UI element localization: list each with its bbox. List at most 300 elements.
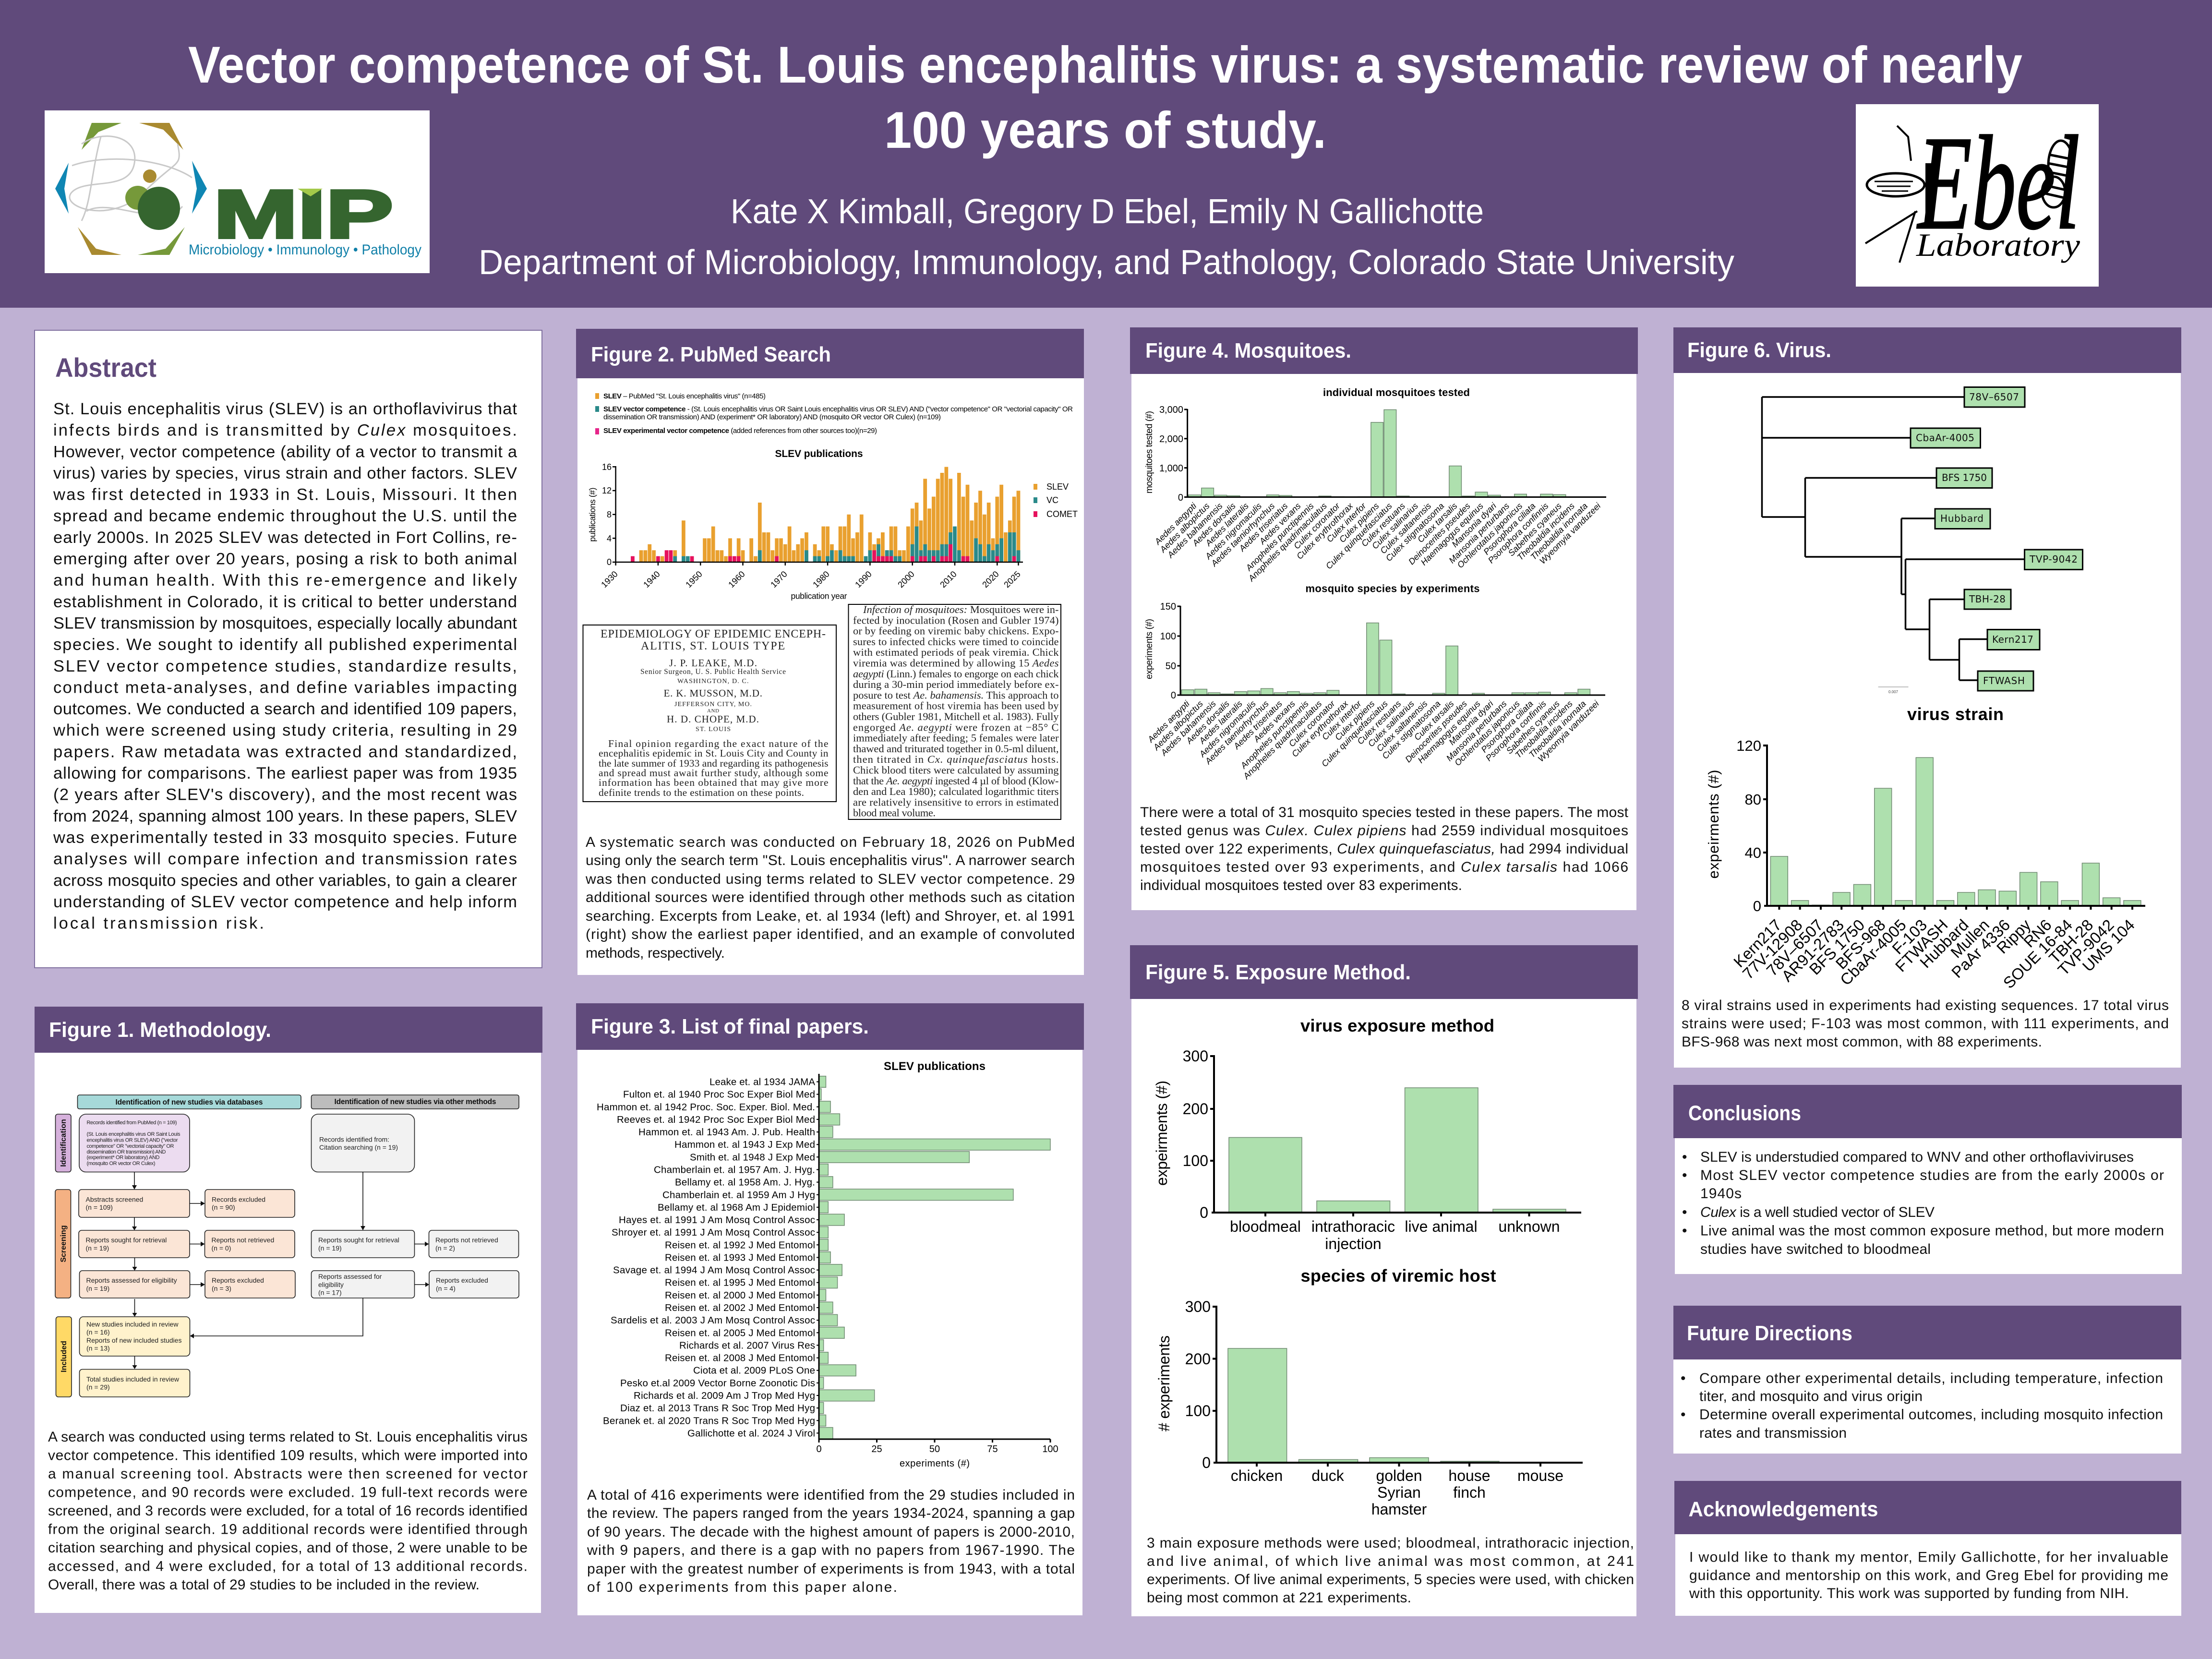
axes: chicken [1231,1467,1283,1484]
bar chart: species of viremic host: species of viremic host [1301,1266,1496,1286]
caption: figure 1: Overall, there was a total of 29 studies to be included in the review. [48,1577,480,1593]
axes: finch [1453,1484,1486,1501]
strain labels [1911,387,2082,691]
excerpt: Shroyer 1991: engorged Ae. aegypti were frozen at −85° C [853,721,1059,733]
strain axis labels: PaAr 4336 [1948,916,2013,981]
bar chart: SLEV publications per year [588,448,1078,601]
axes: 2000 [896,569,916,589]
species labels: Anopheles punctipennis [1238,699,1310,771]
abstract text: and human health. With this re-emergence and likely [53,571,517,589]
strain axis labels: 77V-12908 [1739,916,1806,983]
abstract text: was first detected in 1933 in St. Louis, Missouri. It then [53,486,517,504]
species labels: Culex stigmatosoma [1384,501,1446,563]
caption: figure 2: methods, respectively. [586,945,725,961]
paper labels: Reeves et. al 1942 Proc Soc Exper Biol Med [617,1114,815,1125]
axes: 50 [1166,661,1176,672]
caption: figure 1: competence, and 90 records were excluded. 19 full-text records were [48,1484,528,1501]
axes: experiments (#) [900,1458,970,1469]
species labels: Culex tarsalis [1416,501,1459,544]
box: records identified pubmed [79,1114,190,1172]
legend: search terms: SLEV – PubMed "St. Louis encephalitis virus" (n=485) [603,392,766,400]
box: total studies [80,1369,190,1397]
excerpt: Leake 1934: ALITIS, ST. LOUIS TYPE [641,640,785,652]
abstract text: allowing for comparisons. The earliest paper was from 1935 [53,764,517,782]
species labels: Aedes bahamensis [1159,699,1218,758]
strain axis labels: SOUE 16-84 [2000,916,2076,992]
logo: Ebel Laboratory [1856,104,2099,287]
box: reports assessed: (n = 19) [86,1285,109,1292]
paper labels: Reisen et. al 1993 J Med Entomol [665,1252,815,1263]
paper labels: Richards et al. 2009 Am J Trop Med Hyg [634,1390,815,1401]
abstract text: understanding of SLEV vector competence and help inform [53,893,517,911]
conclusions list: • [1682,1204,1687,1220]
bars [1770,757,2141,906]
heading: abstract: Abstract [55,352,156,383]
species labels: Wyeomyia vanduzeei [1538,501,1603,566]
strain axis labels: Hubbard [1916,916,1972,971]
stage: identification: Identification [60,1119,68,1167]
strain axis labels: 78V–6507 [1763,916,1827,979]
abstract text: establishment in Colorado, it is critical to better understand [53,593,517,611]
strain axis labels: BFS-968 [1832,916,1889,973]
axes: # experiments [1155,1335,1173,1431]
paper labels: Reisen et. al 2005 J Med Entomol [665,1327,815,1338]
panel: figure 2 pubmed search [576,329,1084,975]
species labels: Culex interfor [1325,501,1368,544]
axes: 0 [1200,1204,1208,1221]
legend: search terms: SLEV experimental vector competence (added references from other sources too)(n=29) [603,427,877,435]
species labels: Ochlerotatus japonicus [1453,699,1522,768]
axes: Syrian [1377,1484,1421,1501]
species labels: Culex erythrothorax [1290,698,1350,759]
heading: figure 2: Figure 2. PubMed Search [591,343,831,366]
bars [1182,623,1590,695]
box: new studies included: (n = 16) [86,1328,110,1336]
panel: conclusions [1673,1085,2182,1274]
species labels: Theobaldia inornata [1528,501,1589,562]
species labels: Ochlerotatus japonicus [1455,501,1524,570]
legend: search terms [595,392,1073,435]
excerpt: Leake 1934: Senior Surgeon, U. S. Public Health Service [640,668,786,676]
excerpt: Leake 1934: E. K. MUSSON, M.D. [663,687,762,699]
box: new studies included: Reports of new included studies [86,1336,181,1344]
species labels: Mansonia perturbans [1447,501,1511,565]
box: abstracts screened: Abstracts screened [85,1195,143,1203]
paper labels: Savage et. al 1994 J Am Mosq Control Assoc [613,1265,815,1276]
caption: figure 5 [1147,1535,1634,1606]
axes: 200 [1185,1350,1211,1368]
bars [633,467,1018,562]
axes: 100 [1183,1152,1208,1169]
future directions list [1681,1370,2163,1441]
caption: figure 4: individual mosquitoes tested over 83 experiments. [1140,878,1462,893]
species labels: Culex quinquefasciatus [1320,699,1390,769]
excerpt: Shroyer 1991: aegypti (Linn.) females to engorge on each chick [853,668,1059,680]
conclusions list: 1940s [1700,1186,1742,1202]
paper labels: Reisen et. al 1995 J Med Entomol [665,1277,815,1288]
box: other excluded: Reports excluded [436,1276,488,1284]
species labels: Psorophora confinnis [1484,699,1548,763]
species labels: Culex erythrothorax [1295,501,1355,561]
strain axis labels: RN6 [2020,916,2055,951]
strain axis labels: Kern217 [1730,916,1785,971]
abstract text: conduct meta-analyses, and define variables impacting [53,678,517,697]
stage: included [56,1317,72,1397]
strain labels: CbaAr-4005 [1916,432,1974,444]
axes: duck [1311,1467,1345,1484]
bar chart: experiments per paper [597,1060,1058,1469]
excerpt: Shroyer 1991: measurement of host viremia has been used by [853,700,1059,712]
bar chart: species of viremic host [1155,1266,1583,1518]
conclusions list: studies have switched to bloodmeal [1700,1241,1931,1257]
axes: 1990 [853,569,874,589]
abstract text [53,400,517,933]
title: Vector competence of St. Louis encephalitis virus: a systematic review of nearly [188,36,2022,94]
abstract text: across mosquito species and other variables, to gain a clearer [53,871,517,890]
box: reports sought: (n = 19) [85,1244,109,1252]
species labels: Aedes dorsalis [1184,699,1231,746]
bar chart: virus strain: virus strain [1907,704,2004,724]
axes: 2,000 [1159,434,1183,445]
strain axis labels: CbaAr-4005 [1837,916,1910,989]
paper labels: Bellamy et. al 1958 Am. J. Hyg. [675,1177,815,1188]
axes: 0 [816,1444,822,1455]
box: records excluded: (n = 90) [212,1203,235,1211]
paper labels: Hammon et. al 1942 Proc. Soc. Exper. Biol. Med. [597,1102,815,1113]
species labels: Culex interfor [1320,698,1364,742]
caption: figure 3: paper with the greatest number of experiments is from 1943, with a total [587,1561,1075,1577]
axes: bloodmeal [1230,1218,1301,1235]
abstract text: virus) varies by species, virus strain and other factors. SLEV [53,464,517,482]
authors: Kate X Kimball, Gregory D Ebel, Emily N Gallichotte [731,192,1484,231]
paper labels: Reisen et. al 2000 J Med Entomol [665,1290,815,1301]
excerpt: Shroyer 1991: with estimated periods of peak viremia. Chick [853,646,1059,658]
paper labels: Hammon et. al 1943 J Exp Med [674,1139,815,1150]
paper labels: Bellamy et. al 1968 Am J Epidemiol [658,1202,815,1213]
axes [1144,405,1606,503]
excerpt: Shroyer 1991: Chick blood titers were calculated by assuming [853,764,1059,776]
excerpt: Shroyer 1991: blood meal volume. [853,807,936,819]
panel: acknowledgements [1674,1481,2181,1616]
box: records identified citation: Records identified from: [319,1136,389,1143]
bar chart: mosquito species by experiments: mosquito species by experiments [1306,583,1479,594]
box: other not retrieved [429,1230,518,1258]
strain axis labels: Mullen [1947,916,1993,962]
logo: Ebel Laboratory: Ebel [1916,108,2080,257]
arrows [132,1172,429,1369]
species labels: Haemagogus equinus [1419,501,1485,567]
box: other reports sought [311,1230,415,1258]
excerpt: Leake 1934: ST. LOUIS [696,726,731,733]
axes: 1940 [641,569,662,589]
box: records identified pubmed: encephalitis virus OR SLEV) AND ("vector [86,1138,178,1143]
conclusions list: • [1682,1223,1687,1238]
box: records identified citation: Citation searching (n = 19) [319,1143,398,1151]
box: other assessed: (n = 17) [318,1288,342,1296]
panel: figure 6 virus [1673,327,2181,1068]
species labels: Aedes vexans [1251,699,1297,744]
strain labels: TVP-9042 [2029,553,2078,565]
heading: conclusions: Conclusions [1688,1101,1801,1125]
strain axis labels: F-103 [1888,916,1930,958]
strain axis labels: UMS 104 [2079,916,2138,975]
panel: future directions [1673,1306,2181,1454]
excerpt: Shroyer 1991: posure to test Ae. bahamensis. This approach to [853,689,1059,701]
paper labels: Hayes et. al 1991 J Am Mosq Control Assoc [619,1214,815,1226]
species labels: Aedes nigromaculis [1197,699,1258,759]
excerpt: Shroyer 1991: or by feeding on viremic baby chickens. Expo- [853,625,1059,637]
panel: figure 3 list of final papers [576,1003,1084,1615]
species labels: Aedes nigromaculis [1203,501,1263,562]
caption: figure 1: a manual screening tool. Abstracts were then screened for vector [48,1466,528,1482]
species labels: Aedes taeniorhynchus [1203,699,1271,766]
excerpt: Leake 1934: definite trends to the estimation on these points. [599,787,804,798]
chart legend: VC [1046,495,1058,505]
bar chart: virus exposure method [1153,1016,1581,1252]
axes: 75 [987,1444,998,1455]
excerpt: Shroyer 1991: then titrated in Cx. quinquefasciatus hosts. [853,753,1059,765]
caption: figure 5: 3 main exposure methods were used; bloodmeal, intrathoracic injection, [1147,1535,1634,1551]
bar chart: mosquito species by experiments [1144,583,1605,781]
axes: injection [1325,1235,1382,1252]
axes: publication year [791,591,847,601]
abstract text: SLEV transmission by mosquitoes, especially locally abundant [53,614,517,633]
axes: expeirments (#) [1705,770,1722,878]
axes: 8 [607,510,612,519]
axes: 4 [607,534,612,543]
excerpt: Leake 1934: and spread must await further study, although some [599,767,829,779]
axes: 2025 [1002,569,1022,589]
abstract text: outcomes. We conducted a search and identified 109 papers, [53,700,517,718]
future directions list: Determine overall experimental outcomes, including mosquito infection [1699,1407,2163,1423]
excerpt: Leake 1934: information has been obtained that may give more [599,777,829,788]
axes: 300 [1183,1047,1208,1065]
axes: house [1448,1467,1491,1484]
excerpt: Leake 1934: J. P. LEAKE, M.D. [669,657,757,669]
column header: other methods [311,1095,519,1109]
axes: 1930 [599,569,620,589]
title: 100 years of study. [884,101,1326,159]
excerpt: Shroyer 1991: that the Ae. aegypti ingested 4 µl of blood (Klow- [853,775,1059,787]
bar chart: individual mosquitoes tested: individual mosquitoes tested [1323,386,1470,398]
box: records excluded [205,1190,295,1217]
axes: mosquitoes tested (#) [1144,411,1154,493]
caption: figure 3 [587,1487,1075,1595]
caption: figure 6: 8 viral strains used in experiments had existing sequences. 17 total virus [1682,998,2169,1013]
axes: 100 [1185,1402,1211,1419]
abstract text: early 2000s. In 2025 SLEV was detected in Fort Collins, re- [53,529,517,547]
paper labels: Shroyer et. al 1991 J Am Mosq Control Assoc [612,1227,815,1238]
excerpt: Leake 1934: EPIDEMIOLOGY OF EPIDEMIC ENCEPH- [601,628,826,640]
caption: figure 6: BFS-968 was next most common, with 88 experiments. [1682,1034,2042,1050]
axes [816,1074,1058,1469]
bars [819,1076,1050,1439]
box: reports assessed: Reports assessed for eligibility [86,1276,177,1284]
abstract text: However, vector competence (ability of a vector to transmit a [53,443,517,461]
box: new studies included: (n = 13) [86,1344,110,1352]
abstract text: (2 years after SLEV's discovery), and the most recent was [53,786,517,804]
axes: golden [1376,1467,1422,1484]
paper labels: Beranek et. al 2020 Trans R Soc Trop Med Hyg [603,1415,815,1426]
species labels: Aedes dorsalis [1190,501,1238,548]
axes: 300 [1185,1298,1211,1315]
caption: figure 2: A systematic search was conducted on February 18, 2026 on PubMed [586,834,1075,850]
box: other reports sought: Reports sought for retrieval [318,1236,399,1244]
caption: figure 4: mosquitoes tested over 93 experiments, and Culex tarsalis had 1066 [1140,859,1628,875]
species labels: Aedes vexans [1257,501,1303,546]
title [188,36,2022,159]
abstract text: emerging after over 20 years, posing a risk to both animal [53,550,517,568]
box: reports excluded [205,1271,295,1298]
box: reports sought [79,1230,190,1258]
excerpt: Shroyer 1991: sures to infected chicks were timed to coincide [853,636,1059,648]
conclusions list: Most SLEV vector competence studies are from the early 2000s or [1700,1167,2164,1183]
species labels: Theobaldia incidens [1515,501,1576,562]
bar chart: virus exposure method: virus exposure method [1300,1016,1494,1035]
conclusions list: Live animal was the most common exposure method, but more modern [1700,1223,2164,1238]
box: reports sought: Reports sought for retrieval [85,1236,167,1244]
strain axis labels: TVP-9042 [2054,916,2117,979]
paper labels: Leake et. al 1934 JAMA [709,1076,815,1088]
panel: figure 5 exposure method [1130,945,1638,1616]
species labels: Anopheles quadrimaculatus [1246,501,1329,584]
scale bar: 0.007 [1888,690,1899,694]
abstract text: papers. Raw metadata was extracted and standardized, [53,743,517,761]
paper labels: Diaz et. al 2013 Trans R Soc Trop Med Hyg [620,1403,815,1414]
abstract text: was experimentally tested in 33 mosquito species. Future [53,829,517,847]
future directions list: • [1681,1370,1686,1386]
species labels: Theobaldia incidens [1513,699,1575,760]
species labels: Culex tarsalis [1412,699,1456,742]
excerpt: Shroyer 1991: during a 30-min period immediately before ex- [853,678,1059,690]
flow diagram [55,1095,519,1397]
species labels: Deinocerites pseudes [1407,501,1472,566]
species labels: Culex salinarius [1366,699,1416,749]
bar chart: experiments per paper: SLEV publications [884,1060,986,1073]
excerpt: Leake 1934 [583,625,836,802]
caption: figure 1: vector competence. This identified 109 results, which were imported into [48,1448,528,1463]
caption: figure 4: tested genus was Culex. Culex pipiens had 2559 individual mosquitoes [1140,823,1628,839]
box: other assessed: Reports assessed for [318,1273,382,1280]
acknowledgements text: I would like to thank my mentor, Emily Gallichotte, for her invaluable [1689,1550,2168,1565]
caption: figure 4 [1140,805,1629,893]
strain labels: FTWASH [1983,675,2025,686]
axes: intrathoracic [1311,1218,1395,1235]
strain axis labels: TBH-28 [2045,916,2096,967]
box: other not retrieved: Reports not retrieved [435,1236,498,1244]
heading: figure 4: Figure 4. Mosquitoes. [1145,339,1351,362]
axes: 1,000 [1159,463,1183,474]
species labels: Aedes aegypti [1145,698,1192,745]
caption: figure 2: additional sources were identified through other methods such as citation [586,890,1075,905]
species labels: Culex coronator [1287,698,1337,749]
axes: expeirments (#) [1153,1081,1170,1186]
stage: identification [56,1114,71,1172]
heading: figure 3: Figure 3. List of final papers. [591,1015,869,1038]
axes: 100 [1042,1444,1058,1455]
abstract text: SLEV vector competence studies, standardize results, [53,657,517,675]
box: records excluded: Records excluded [212,1195,265,1203]
phylogenetic tree [1762,387,2082,694]
excerpt: Shroyer 1991: Infection of mosquitoes: Mosquitoes were in- [863,603,1059,615]
axes: unknown [1498,1218,1560,1235]
acknowledgements text: with this opportunity. This work was supported by funding from NIH. [1689,1586,2129,1601]
axes: experiments (#) [1144,619,1154,679]
box: records identified citation [311,1114,415,1172]
axes [1144,601,1605,701]
strain labels: BFS 1750 [1942,472,1987,483]
species labels: Sabethes cyaneus [1506,501,1563,558]
axes: live animal [1405,1218,1478,1235]
paper labels: Pesko et.al 2009 Vector Borne Zoonotic Dis [620,1378,815,1389]
axes: 1980 [811,569,831,589]
future directions list: • [1681,1407,1686,1423]
species labels: Culex coronator [1292,501,1342,551]
stage: screening: Screening [60,1225,68,1262]
conclusions list: SLEV is understudied compared to WNV and other orthoflaviviruses [1700,1149,2134,1165]
box: other excluded: (n = 4) [436,1285,456,1292]
species labels: Haemagogus equinus [1416,699,1482,765]
strain axis labels [1730,915,2138,992]
caption: figure 4: There were a total of 31 mosquito species tested in these papers. The most [1140,805,1629,820]
legend: search terms: SLEV vector competence - (St. Louis encephalitis virus OR Saint Louis encephalitis virus OR SLEV) AND ("vector competence" OR "vectorial capacity" OR [603,405,1073,413]
abstract text: analyses will compare infection and transmission rates [53,850,517,868]
paper labels: Reisen et. al 2002 J Med Entomol [665,1302,815,1313]
axes: publications (#) [588,488,597,541]
species labels: Culex restuans [1355,699,1403,746]
species labels: Culex pipiens [1333,699,1376,742]
chart legend [1034,482,1078,519]
excerpt: Shroyer 1991: thawed and triturated together in 0.5-ml diluent, [853,743,1059,755]
axes: 0 [1171,690,1176,701]
axes: 25 [871,1444,882,1455]
conclusions list: • [1682,1149,1687,1165]
header banner [0,0,2212,308]
species labels: Psorophora ciliata [1479,699,1535,755]
strain axis labels: AR91-2783 [1778,916,1847,985]
excerpt: Leake 1934: the late summer of 1933 and regarding its pathogenesis [599,757,829,769]
caption: figure 1: citation searching and physical copies, and of those, 2 were unable to be [48,1540,528,1556]
logo: MIP: MIP [214,176,393,252]
excerpt: Leake 1934: JEFFERSON CITY, MO. [674,701,752,708]
legend: search terms: dissemination OR transmission) AND (experiment* OR laboratory) AND (mosquito OR vector OR Culex) (n=109) [603,413,941,421]
caption: figure 1 [48,1429,528,1593]
axes: 100 [1160,631,1176,642]
box: reports excluded: Reports excluded [212,1276,264,1284]
paper labels: Reisen et. al 1992 J Med Entomol [665,1239,815,1250]
axes: 2020 [980,569,1001,589]
caption: figure 6 [1682,998,2169,1050]
column header: databases [78,1095,301,1109]
paper labels: Gallichotte et al. 2024 J Virol [687,1428,815,1439]
abstract text: St. Louis encephalitis virus (SLEV) is an orthoflavivirus that [53,400,517,418]
species labels: Wyeomyia vanduzeei [1536,698,1601,764]
conclusions list: • [1682,1167,1687,1183]
paper labels: Hammon et. al 1943 Am. J. Pub. Health [638,1127,815,1138]
logo: MIP [45,110,430,273]
axes: 40 [1745,844,1761,861]
caption: figure 2: (right) show the earliest paper identified, and an example of convoluted [586,926,1075,942]
box: other reports sought: (n = 19) [318,1244,342,1252]
future directions list: Compare other experimental details, including temperature, infection [1699,1370,2163,1386]
acknowledgements text [1689,1550,2168,1601]
strain axis labels: Rippy [1993,915,2034,957]
scale bar [1878,687,1909,694]
axes: 16 [602,462,612,472]
axes: 12 [602,486,612,495]
axes: 50 [929,1444,940,1455]
species labels: Psorophora confinnis [1486,501,1551,565]
